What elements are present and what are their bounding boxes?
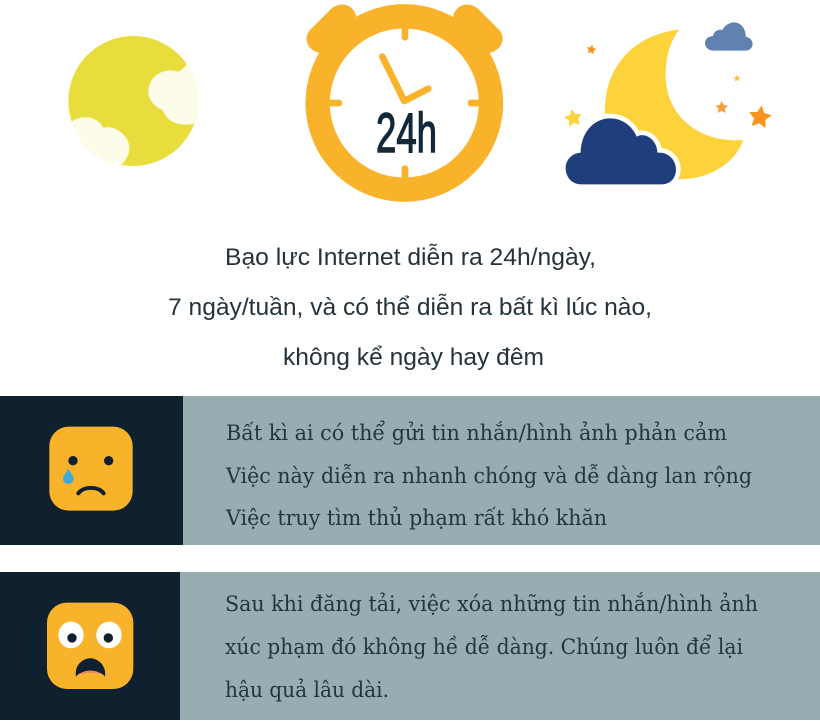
right bell [453, 5, 503, 60]
panel text: Sau khi đăng tải, việc xóa những tin nhắn/hình ảnh [225, 592, 758, 616]
icon: crying face [49, 427, 133, 511]
left bell [307, 5, 357, 60]
panel text: Bất kì ai có thể gửi tin nhắn/hình ảnh phản cảm [226, 421, 727, 445]
clock ring [318, 16, 491, 190]
blue cloud [705, 22, 753, 51]
dark cloud [566, 118, 676, 184]
intro text: Bạo lực Internet diễn ra 24h/ngày, [225, 244, 596, 271]
24h label: 24h [376, 101, 437, 164]
icon: alarm clock 24h [307, 5, 503, 190]
icon: moon, clouds and stars [563, 22, 773, 184]
panel text: Việc truy tìm thủ phạm rất khó khăn [225, 506, 607, 530]
intro text: không kể ngày hay đêm [283, 344, 544, 371]
icon: shocked face [47, 603, 133, 689]
panel text: Việc này diễn ra nhanh chóng và dễ dàng lan rộng [225, 464, 752, 488]
panel: lasting consequences [0, 572, 820, 720]
icon: sun with clouds [68, 36, 199, 166]
hour ticks [331, 29, 478, 177]
crescent moon [605, 29, 743, 179]
clock hands [382, 57, 428, 101]
intro text: 7 ngày/tuần, và có thể diễn ra bất kì lúc nào, [168, 294, 652, 321]
panel text: hậu quả lâu dài. [225, 678, 389, 702]
panel text [225, 421, 752, 530]
panel text: xúc phạm đó không hề dễ dàng. Chúng luôn để lại [225, 635, 743, 659]
stars [563, 44, 773, 129]
panel text [225, 592, 758, 702]
intro text [168, 244, 652, 371]
panel: spreading content [0, 396, 820, 545]
